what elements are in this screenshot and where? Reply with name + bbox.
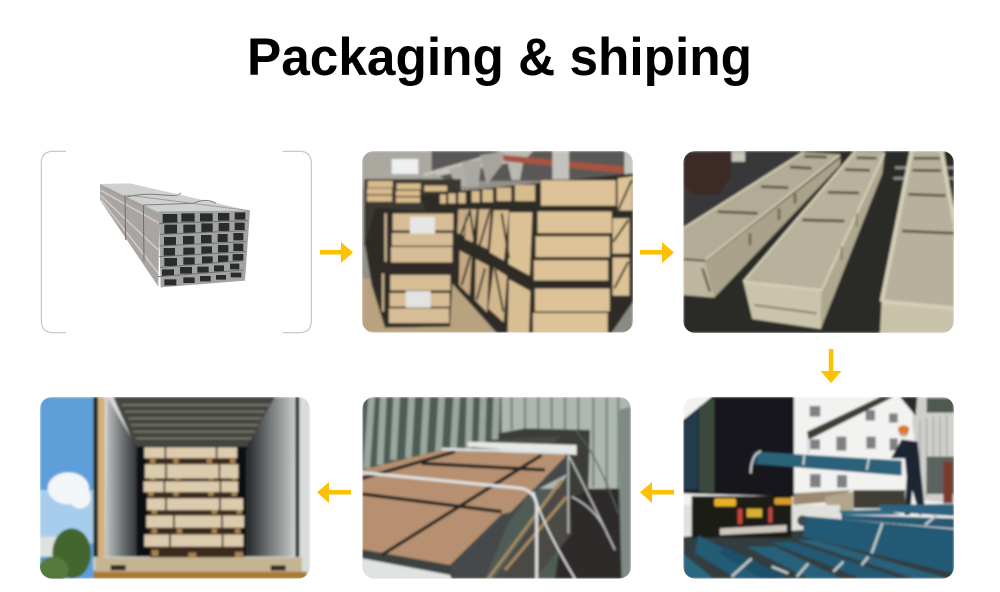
- container walls: [362, 397, 631, 579]
- panel: plates loaded in open container: [38, 397, 310, 583]
- steel bundle: [100, 183, 250, 287]
- arrow: panel 1 to 2: [320, 242, 353, 263]
- ground under pipes: [683, 530, 954, 579]
- container sill: [95, 558, 302, 572]
- back crates: [364, 179, 461, 246]
- tree: [52, 528, 91, 578]
- truck: [683, 397, 794, 497]
- panel: loading blue pipes onto truck: [683, 397, 954, 579]
- rails: [893, 168, 954, 178]
- white bars and ropes: [362, 473, 537, 579]
- person legs at corner: [683, 151, 732, 195]
- case one: [683, 152, 840, 260]
- arrow: panel 4 to 5: [640, 482, 674, 503]
- title: Packaging & shiping: [247, 28, 752, 87]
- panel: long wooden cases on floor: [683, 151, 954, 333]
- panel: wooden crates in factory: [362, 151, 633, 333]
- worker: [891, 439, 925, 516]
- factory background: [362, 180, 542, 332]
- dark wrap on plate edge: [450, 455, 568, 579]
- case two: [743, 152, 884, 290]
- case three: [882, 151, 954, 308]
- floor: [683, 151, 954, 333]
- hanging pipe: [755, 452, 902, 476]
- panel: steel channel bundle: [41, 151, 311, 333]
- plate top: [362, 450, 567, 565]
- arrow: panel 3 to 4: [820, 349, 842, 383]
- plate stacks: [147, 458, 243, 557]
- arrow: panel 5 to 6: [317, 482, 351, 503]
- sky: [40, 397, 97, 579]
- arrow: panel 2 to 3: [640, 242, 674, 263]
- cloud: [48, 472, 89, 504]
- building background: [683, 397, 954, 579]
- back stack: [498, 428, 590, 500]
- long crate frame: [420, 173, 633, 333]
- right door edge: [299, 397, 310, 579]
- front sides: [495, 473, 572, 579]
- black straps: [362, 452, 545, 555]
- container interior: [93, 397, 300, 570]
- crane arm: [807, 397, 893, 440]
- pipes on ground: [878, 504, 954, 516]
- panel outline: [41, 151, 311, 333]
- panel: steel plates in container: [362, 397, 631, 579]
- small stacked crates: [365, 208, 457, 328]
